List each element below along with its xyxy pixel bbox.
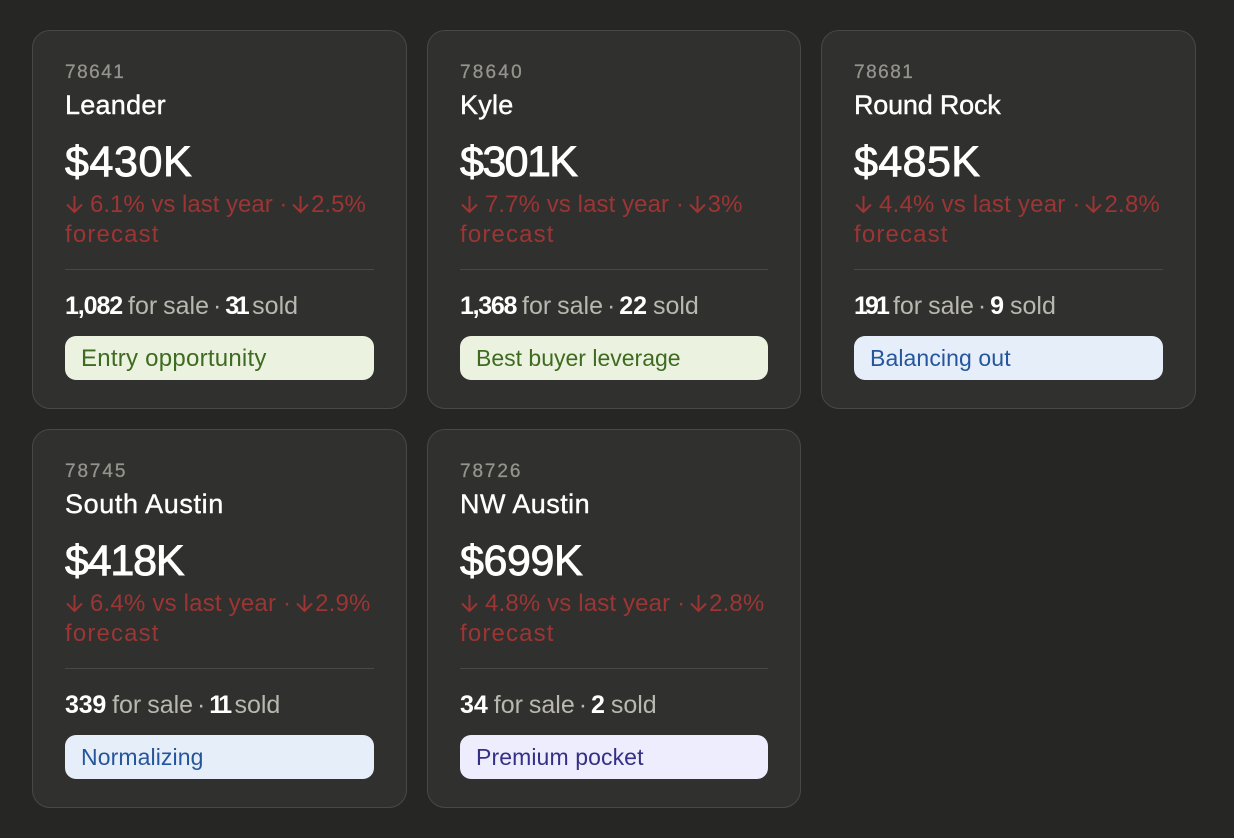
- price change: forecast: [65, 221, 160, 248]
- price change: 7.7% vs last year · 3%: [485, 191, 743, 218]
- price change: [460, 590, 764, 647]
- badge: premium pocket: [460, 735, 768, 779]
- badge: normalizing: [65, 735, 374, 779]
- card: Round Rock 78681: [821, 30, 1196, 409]
- badge: balancing out: [854, 336, 1163, 380]
- price change: 4.8% vs last year · 2.8%: [485, 590, 764, 617]
- median price: $699K: [460, 537, 582, 585]
- zip code: 78726: [460, 461, 522, 482]
- median price: $485K: [854, 138, 980, 186]
- neighborhood name: Kyle: [460, 90, 514, 120]
- price change: forecast: [65, 620, 160, 647]
- listing stats: 191 for sale · 9 sold: [854, 292, 1056, 320]
- listing stats: 1,082 for sale · 31 sold: [65, 292, 298, 320]
- price change: [65, 191, 366, 248]
- zip code: 78745: [65, 461, 127, 482]
- price change: 6.4% vs last year · 2.9%: [90, 590, 371, 617]
- neighborhood name: NW Austin: [460, 489, 590, 519]
- card: Kyle 78640: [427, 30, 801, 409]
- zip code: 78640: [460, 62, 524, 83]
- price change: 4.4% vs last year · 2.8%: [879, 191, 1160, 218]
- badge: entry opportunity: [65, 336, 374, 380]
- median price: $301K: [460, 138, 576, 186]
- card: South Austin 78745: [32, 429, 407, 808]
- badge: best buyer leverage: [460, 336, 768, 380]
- badge: normalizing: Normalizing: [81, 744, 204, 770]
- badge: premium pocket: Premium pocket: [476, 744, 644, 770]
- price change: [65, 590, 371, 647]
- neighborhood name: South Austin: [65, 489, 224, 519]
- price change: forecast: [460, 620, 555, 647]
- listing stats: 1,368 for sale · 22 sold: [460, 292, 699, 320]
- listing stats: 34 for sale · 2 sold: [460, 691, 657, 719]
- median price: $430K: [65, 138, 192, 186]
- price change: forecast: [854, 221, 949, 248]
- neighborhood name: Round Rock: [854, 90, 1001, 120]
- zip code: 78641: [65, 62, 125, 83]
- card: Leander 78641: [32, 30, 407, 409]
- badge: entry opportunity: Entry opportunity: [81, 345, 267, 372]
- price change: [460, 191, 743, 248]
- zip code: 78681: [854, 62, 914, 83]
- price change: forecast: [460, 221, 555, 248]
- card: NW Austin 78726: [427, 429, 801, 808]
- badge: balancing out: Balancing out: [870, 345, 1011, 371]
- neighborhood name: Leander: [65, 90, 166, 120]
- listing stats: 339 for sale · 11 sold: [65, 691, 280, 719]
- price change: 6.1% vs last year · 2.5%: [90, 191, 366, 218]
- median price: $418K: [65, 537, 183, 585]
- price change: [854, 191, 1160, 248]
- badge: best buyer leverage: Best buyer leverage: [476, 345, 681, 371]
